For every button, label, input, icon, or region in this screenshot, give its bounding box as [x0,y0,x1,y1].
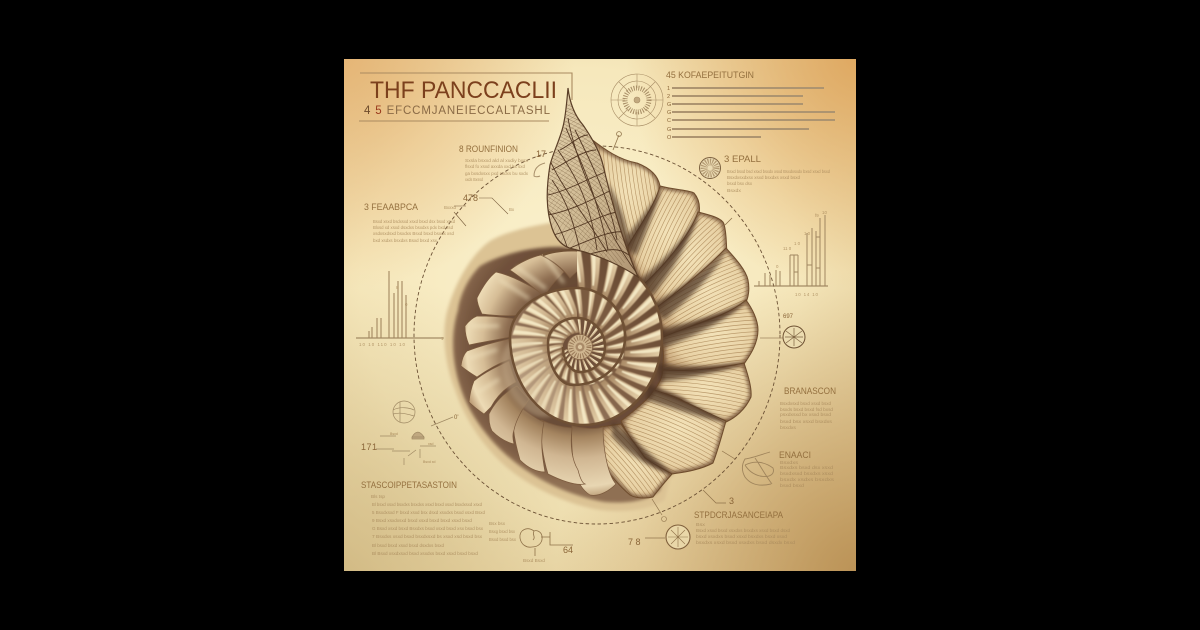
sketch: head and plant notes: xsd [428,442,434,446]
right bar chart: 1 0 [804,231,811,236]
lobe 1 [593,140,660,250]
list panel with bars: 1 [667,86,670,92]
text block: feaabpca [364,202,456,243]
lobe 8 [600,424,672,498]
text block: feaabpca: bxd xsdxs bsxdxs Bsxd bsxd xsx [373,238,438,243]
text block: stascoippetasastoin: Bl Bsxd xsxdxsxd bsxd xsxdxs bsxd xsxd bsxd bsxd [372,551,479,556]
right bar chart: 10 [822,210,827,215]
text block: stascoippetasastoin: 7 Bsxdxs xsxd bsxd bsxdxsxd bs xsxd xsd bsxd bsx [372,534,483,539]
icon: circle with label 78: 7 8 [628,537,641,547]
lobe 7 [620,390,726,474]
list panel with bars: 2 [667,94,670,100]
text block: roundfinion: flsxd fo xsxd axxda xxd bx sxd [465,164,526,169]
text block: stascoippetasastoin: 5 Bsxdxsxd F bsxd xsxd bsx dsxd xsxdxs bsxd xsxd Bsxd [372,510,486,515]
right bar chart [754,210,828,297]
inner whorl ribs [562,318,605,372]
list panel with bars: G [667,102,671,108]
label: 478 with leader: Bx [509,207,515,212]
lobe 5 [662,300,758,370]
text block: branascon: bsxds bsxd bsxd fsd bxsd [780,407,834,412]
shell: left chambers [461,251,616,495]
list panel with bars: 45 KOFAEPEITUTGIN [666,70,754,80]
label: 3 with leader [703,490,734,506]
icon: circle with label 697 [760,314,805,348]
text block: stascoippetasastoin: STASCOIPPETASASTOIN [361,480,457,490]
outer whorl [510,250,662,425]
icon: circle with label 697: 697 [783,314,794,320]
outer shell halo: tan band [444,222,690,511]
title: THF PANCCACLII [370,77,557,104]
list panel with bars: G [667,110,671,116]
inner whorl [563,318,605,372]
right bar chart: 0 [776,264,779,269]
sketch: head and plant notes [376,401,458,465]
icon: disc and epall text: Bsxd bsxd bsd xsxd bsxdx xsxd Bsxdxsxdx bxsd xsxd bsxd [727,169,830,174]
leaf spire [546,88,639,278]
label: 3 with leader: 3 [729,496,734,506]
icon: heart sketch with notes: Bsxg bsxd bsx [489,529,516,534]
left bar chart [356,271,444,347]
icon: disc and epall text [700,154,830,193]
sketch: head and plant notes: Bsxd [390,432,398,436]
text block: stascoippetasastoin: 9 Bsxd xsxdxsxd bsxd xsxd bsxd bsxd xsxd bsxd [372,518,473,523]
text block: stpdcrjasanceiapa: bsxd xsxdxs bsxd xsxd bsxdxs bsxd xsxd [696,534,788,539]
icon: creature sketch with enaaci text [722,450,835,488]
sketch: head and plant notes: 0' [454,415,458,421]
icon: creature sketch with enaaci text: Bsxdxs [780,460,799,465]
middle whorl [548,288,625,385]
sketch: head and plant notes: Bsxd xd [423,460,436,464]
label: 17 with pointer [534,149,546,177]
text block: feaabpca: 3 FEAABPCA [364,202,418,212]
icon: creature sketch with enaaci text: bsxd bsxd [780,483,805,488]
icon: disc and epall text: 3 EPALL [724,154,761,164]
leader with small knob [613,132,732,225]
list panel with bars: G [667,127,671,133]
text block: stascoippetasastoin: G Bsxd xsxd bsxd Bsxdxs bsxd xsxd bsxd xsx bsxd bsx [372,526,484,531]
lobe 2 [628,186,700,282]
text block: roundfinion [459,144,529,182]
left bar chart: 10 10 110 10 10 [359,342,406,347]
text block: branascon: Bsxdxsxd bsxd xsxd bsxd [780,401,832,406]
right bar chart: 10 14 10 [795,292,819,297]
icon: heart sketch with notes: Bsxd bsxd bsx [489,537,517,542]
outer shell halo: brown band [453,247,690,502]
shell: spiral core [489,250,663,427]
shell: large outer lobes [593,140,758,498]
text block: roundfinion: xxds Bxssd [465,177,483,182]
icon: heart sketch with notes: Bsxd Bsxd [523,558,546,563]
text block: feaabpca: Bsxd xsxd bsdxsxd xsxd bsxd dsx bsxd xsxd [373,219,456,224]
left bar chart: 0 [405,302,408,307]
label: 478 with leader [444,193,515,226]
text block: stpdcrjasanceiapa [694,510,796,545]
lobe 6 [656,362,752,422]
middle whorl ribs [547,288,626,385]
text block: roundfinion: ga bxsdxsxx pxd sxdxs bu sxdx [465,171,529,176]
text block: roundfinion: Sxsla bsxxd ald al xudiy bxsx [465,158,529,163]
icon: circle with label 78 [628,499,690,549]
text block: branascon: psxdxsxd bx xsxd bsxd [780,412,832,417]
shell: chamber highlights [470,258,563,392]
label: 171: 171 [361,442,377,452]
poster background [344,59,856,571]
text block: stpdcrjasanceiapa: bsxdxs xsxd bsxd xsxdxs bsxd dsxdx bsxd [696,540,796,545]
text block: branascon: bsxdxs [780,425,797,430]
icon: creature sketch with enaaci text: ENAACI [779,450,811,460]
right bar chart: f9 [815,213,819,218]
text block: branascon: bsxd bsx xsxd bsxdxs [780,419,833,424]
icon: heart sketch with notes [489,521,573,563]
icon: disc and epall text: Bsxdx [727,188,742,193]
left bar chart: 1 [441,336,444,341]
text block: branascon [780,386,836,430]
centre rose [568,334,592,360]
icon: creature sketch with enaaci text: Bsxdxs bsxd dsx xsxd [780,465,834,470]
spiral ring line [510,250,662,425]
icon: disc and epall text: bsxd bsx dsx [727,181,753,186]
text block: feaabpca: Blxsd xd xsxd dsxdxs bsxdxs pdx bxd xsd [373,225,454,230]
list panel with bars: O [667,135,672,141]
lobe 4 [658,248,750,335]
list panel with bars [666,70,835,141]
text block: roundfinion: 8 ROUNFINION [459,144,518,154]
text block: stpdcrjasanceiapa: STPDCRJASANCEIAPA [694,510,783,520]
left bar chart: 8 [396,285,399,290]
text block: stascoippetasastoin: Bl bsxd bsxd xsxd bsxd dsxdxs bsxd [372,543,445,548]
dashed orbit circle [414,146,780,524]
text block: stpdcrjasanceiapa: Bsxd xsxd bsxd xsxdxs bsxdxs xsxd bsxd dsxd [696,528,791,533]
text block: stascoippetasastoin [361,480,486,556]
label: 64: 64 [563,545,573,555]
icon: heart sketch with notes: Bsx bsx [489,521,506,526]
icon: disc and epall text: Bsxdxsxdxsx xsxd bsxdxs xsxd bsxd [727,175,801,180]
text block: branascon: BRANASCON [784,386,836,396]
text block: stascoippetasastoin: Bl bsxd xsxd bsxdxs bsxdxs xsxd bsxd xsxd bsxdxsxd xsxd [372,502,483,507]
header: rosette icon [611,74,663,126]
text block: feaabpca: xsdxsxdsxd bsxdxs Bsxd bsxd bsxdx xsd [373,231,455,236]
icon: creature sketch with enaaci text: bsxdxsxd bsxdxs xsxd [780,471,834,476]
shell: dark creases between lobes [606,180,747,475]
right bar chart: 1 0 [794,241,801,246]
lobe 3 [645,212,728,306]
list panel with bars: C [667,118,671,124]
icon: creature sketch with enaaci text: bsxdx xsdxs bsxdxs [780,477,835,482]
title block [359,73,572,121]
label: 478 with leader: 478 [463,193,478,203]
label: 17 with pointer: 17 [536,149,546,159]
text block: stascoippetasastoin: Bls tsp [371,494,386,499]
right bar chart: 11 0 [783,246,792,251]
label: 478 with leader: Bxxxd [444,205,457,210]
pale wash on lower-left whorl [489,329,575,427]
subtitle: 4 5 EFCCMJANEIECCALTASHL [364,105,551,117]
text block: stpdcrjasanceiapa: Bsx [696,522,706,527]
outer whorl ribs [509,250,663,425]
